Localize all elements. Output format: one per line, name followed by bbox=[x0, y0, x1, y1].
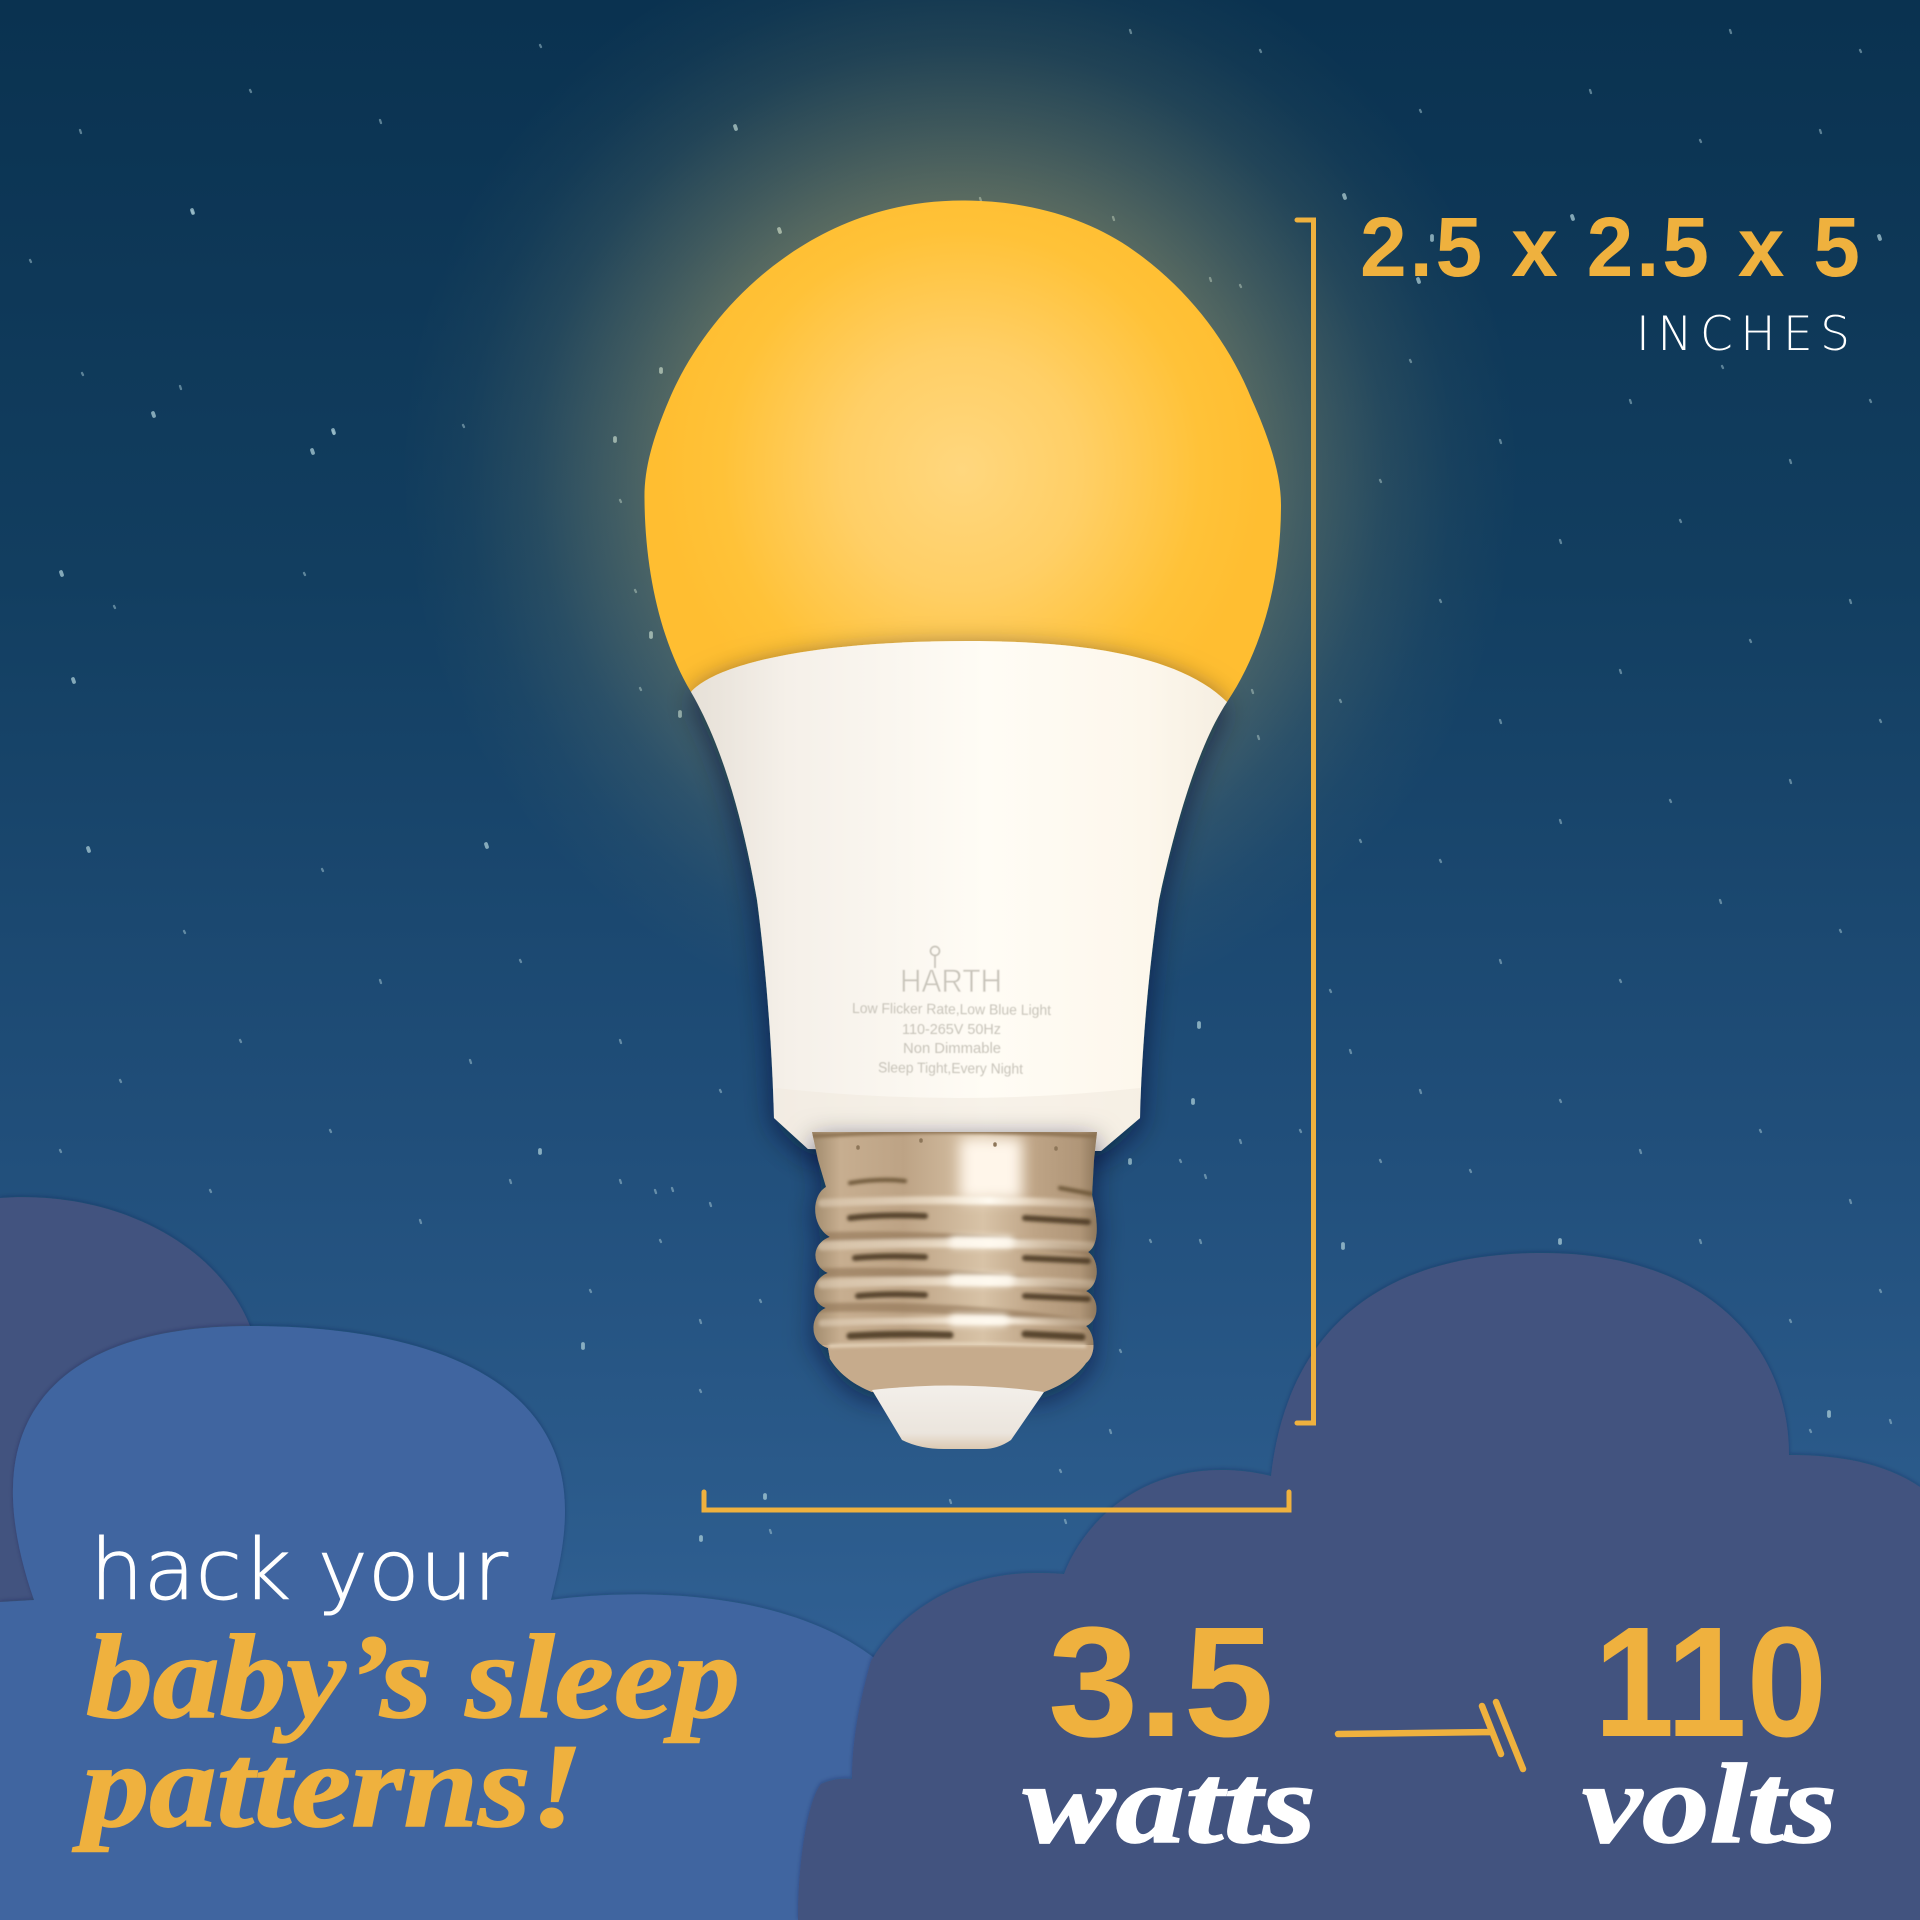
headline line 1: hack your bbox=[90, 1521, 508, 1619]
product line 2: 110-265V 50Hz bbox=[902, 1022, 1001, 1038]
metal screw base bbox=[812, 1132, 1097, 1392]
dimension bracket: height bbox=[1297, 220, 1314, 1423]
headline line 3: patterns! bbox=[72, 1719, 583, 1852]
headline line 2: baby’s sleep bbox=[86, 1610, 740, 1743]
outer glow bbox=[400, 0, 1520, 1030]
dimensions value: 2.5 x 2.5 x 5 bbox=[1360, 200, 1860, 294]
white ceramic tip bbox=[872, 1385, 1044, 1449]
volts value: 110 bbox=[1594, 1595, 1827, 1770]
watts label: watts bbox=[1023, 1740, 1316, 1867]
logo lamp mark bbox=[930, 946, 940, 968]
bulb bbox=[644, 200, 1281, 1449]
icon: arrow bbox=[1338, 1702, 1523, 1769]
product line 3: Non Dimmable bbox=[903, 1041, 1001, 1057]
stat: volts bbox=[1582, 1595, 1837, 1867]
volts label: volts bbox=[1582, 1740, 1837, 1867]
bulb white plastic body bbox=[691, 641, 1227, 1151]
product line 1: Low Flicker Rate,Low Blue Light bbox=[852, 1001, 1051, 1019]
right foreground cloud bbox=[798, 1253, 1920, 1920]
headline bbox=[72, 1521, 740, 1852]
bulb glass dome bbox=[644, 200, 1281, 702]
bulb collar shading bbox=[774, 1088, 1140, 1151]
brand name: HARTH bbox=[900, 963, 1002, 999]
stars bbox=[30, 30, 1891, 1540]
stat: watts bbox=[1023, 1595, 1316, 1867]
dimensions unit: INCHES bbox=[1636, 307, 1850, 362]
watts value: 3.5 bbox=[1048, 1595, 1274, 1770]
rivets bbox=[858, 1140, 1056, 1149]
screw thread bands bbox=[810, 1132, 1105, 1395]
left foreground cloud bbox=[0, 1326, 900, 1920]
bulb label: HARTH logo bbox=[852, 946, 1051, 1078]
dimension bracket: width bbox=[704, 1492, 1289, 1510]
product line 4: Sleep Tight,Every Night bbox=[878, 1060, 1023, 1078]
back left cloud bbox=[0, 1197, 300, 1640]
